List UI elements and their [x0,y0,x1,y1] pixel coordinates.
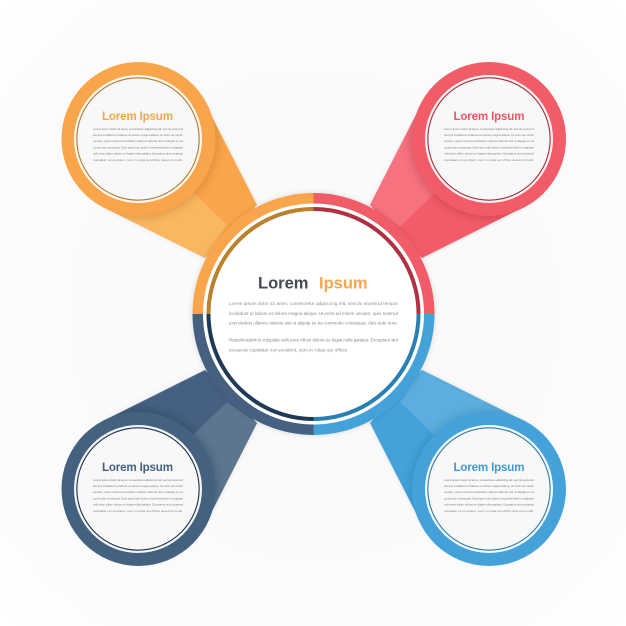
body text: commodo consequat. Duis aute irure dolor in reprehenderit in voluptate [93,145,183,149]
main title: Lorem [258,274,308,292]
body text: veniam, quis nostrud exercitation ullamco laboris nisi ut aliquip ex ea [444,139,534,143]
four-colour inner ring [206,207,420,421]
circle: orange [60,61,216,217]
body text: tempor incididunt ut labore et dolore magna aliqua. Ut enim ad minim [93,484,183,488]
body text: veniam, quis nostrud exercitation ullamco laboris nisi ut aliquip ex ea [93,139,183,143]
connector: blue beam [370,370,524,521]
body text [93,127,183,162]
body text: commodo consequat. Duis aute irure dolor in reprehenderit in voluptate [93,496,183,500]
heading: Lorem Ipsum [102,461,173,474]
panel: top-left orange [60,61,257,258]
body text [93,478,183,513]
body text: cupidatat non proident, sunt in culpa qui officia deserunt mollit. [93,509,183,513]
body text: cupidatat non proident, sunt in culpa qui officia deserunt mollit. [444,509,534,513]
white centre [210,211,416,417]
body text: tempor incididunt ut labore et dolore magna aliqua. Ut enim ad minim [444,484,534,488]
main body text: Reprehenderit in voluptate velit esse cillum dolore eu fugiat nulla pariatur. Excepteur sint [229,338,399,342]
main body text: occaecat cupidatat non proident, sunt in culpa qui officia [229,348,347,352]
heading: Lorem Ipsum [102,110,173,123]
body text: Lorem ipsum dolor sit amet, consectetur adipiscing elit, sed do eiusmod [93,478,183,482]
body text [444,127,534,162]
connector: navy beam [103,370,257,521]
body text: velit esse cillum dolore eu fugiat nulla pariatur. Excepteur sint occaecat [93,502,183,506]
main title: Ipsum [319,274,368,292]
body text [444,478,534,513]
panel: top-right red [370,61,567,258]
panel: bottom-left navy [60,370,257,567]
main body text: Lorem ipsum dolor sit amet, consectetur adipiscing elit, sed do eiusmod tempor [229,301,398,306]
connector: red beam [370,107,524,258]
infographic [62,62,566,566]
body text: cupidatat non proident, sunt in culpa qui officia deserunt mollit. [93,158,183,162]
circle: red [411,61,567,217]
panel: central circle [192,193,434,435]
body text: commodo consequat. Duis aute irure dolor in reprehenderit in voluptate [444,496,534,500]
body text: commodo consequat. Duis aute irure dolor in reprehenderit in voluptate [444,145,534,149]
connector: orange beam [103,107,257,258]
body text: cupidatat non proident, sunt in culpa qui officia deserunt mollit. [444,158,534,162]
main body text: incididunt ut labore et dolore magna aliqua. Ut enim ad minim veniam, quis nostrud [229,311,398,316]
body text: Lorem ipsum dolor sit amet, consectetur adipiscing elit, sed do eiusmod [93,127,183,131]
white gap ring [203,204,424,424]
body text: velit esse cillum dolore eu fugiat nulla pariatur. Excepteur sint occaecat [444,502,534,506]
body text: Lorem ipsum dolor sit amet, consectetur adipiscing elit, sed do eiusmod [444,478,534,482]
heading: Lorem Ipsum [454,110,524,123]
heading: Lorem Ipsum [454,461,524,474]
main body text [229,301,399,352]
panel: bottom-right blue [370,370,567,567]
body text: veniam, quis nostrud exercitation ullamco laboris nisi ut aliquip ex ea [93,490,183,494]
main body text: exercitation ullamco laboris nisi ut aliquip ex ea commodo consequat, duis aute irure. [229,320,398,326]
body text: tempor incididunt ut labore et dolore magna aliqua. Ut enim ad minim [444,133,534,137]
circle: navy [60,411,216,567]
body text: veniam, quis nostrud exercitation ullamco laboris nisi ut aliquip ex ea [444,490,534,494]
body text: Lorem ipsum dolor sit amet, consectetur adipiscing elit, sed do eiusmod [444,127,534,131]
circle: blue [411,411,567,567]
body text: velit esse cillum dolore eu fugiat nulla pariatur. Excepteur sint occaecat [93,152,183,156]
body text: velit esse cillum dolore eu fugiat nulla pariatur. Excepteur sint occaecat [444,152,534,156]
body text: tempor incididunt ut labore et dolore magna aliqua. Ut enim ad minim [93,133,183,137]
four-colour outer ring [192,193,434,435]
